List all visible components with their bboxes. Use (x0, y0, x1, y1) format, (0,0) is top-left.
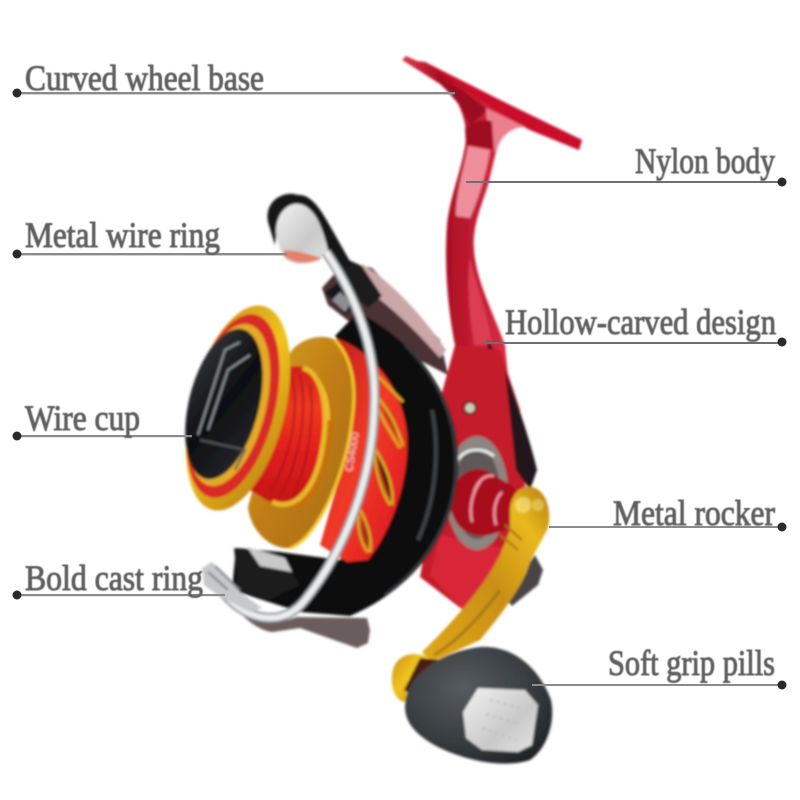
callout: Nylon body (466, 141, 786, 186)
rotor cup with gold slats: CS4000 (343, 431, 362, 473)
spool line body (250, 366, 325, 504)
illustration: fishing reel (167, 56, 582, 764)
reel stem and foot (402, 56, 582, 400)
upper bail arm (322, 258, 448, 375)
grip knob (404, 647, 552, 764)
bail head top (268, 194, 352, 272)
lower bail arm (238, 610, 370, 648)
bail roller (202, 562, 262, 612)
handle arm gold (392, 487, 549, 702)
callout: Metal rocker: Metal rocker (613, 493, 775, 533)
spool rear flange (248, 337, 354, 548)
callout: Metal rocker (549, 493, 786, 533)
silver bail wire (210, 252, 374, 618)
spool black cap (171, 321, 277, 487)
reel body (420, 345, 543, 610)
callout: Wire cup (12, 398, 192, 440)
knob silver plate (463, 688, 538, 752)
callout: Soft grip pills (532, 643, 786, 690)
callout: Curved wheel base: Curved wheel base (25, 58, 264, 98)
callout: Metal wire ring: Metal wire ring (25, 215, 220, 255)
rotor black ring (232, 312, 458, 616)
spool front flange (167, 295, 309, 521)
callout: Bold cast ring: Bold cast ring (25, 558, 203, 598)
callout: Curved wheel base (12, 58, 455, 98)
hub gear and red shaft (446, 402, 515, 550)
callout: Wire cup: Wire cup (25, 398, 140, 438)
rotor cup with gold slats (320, 338, 407, 562)
